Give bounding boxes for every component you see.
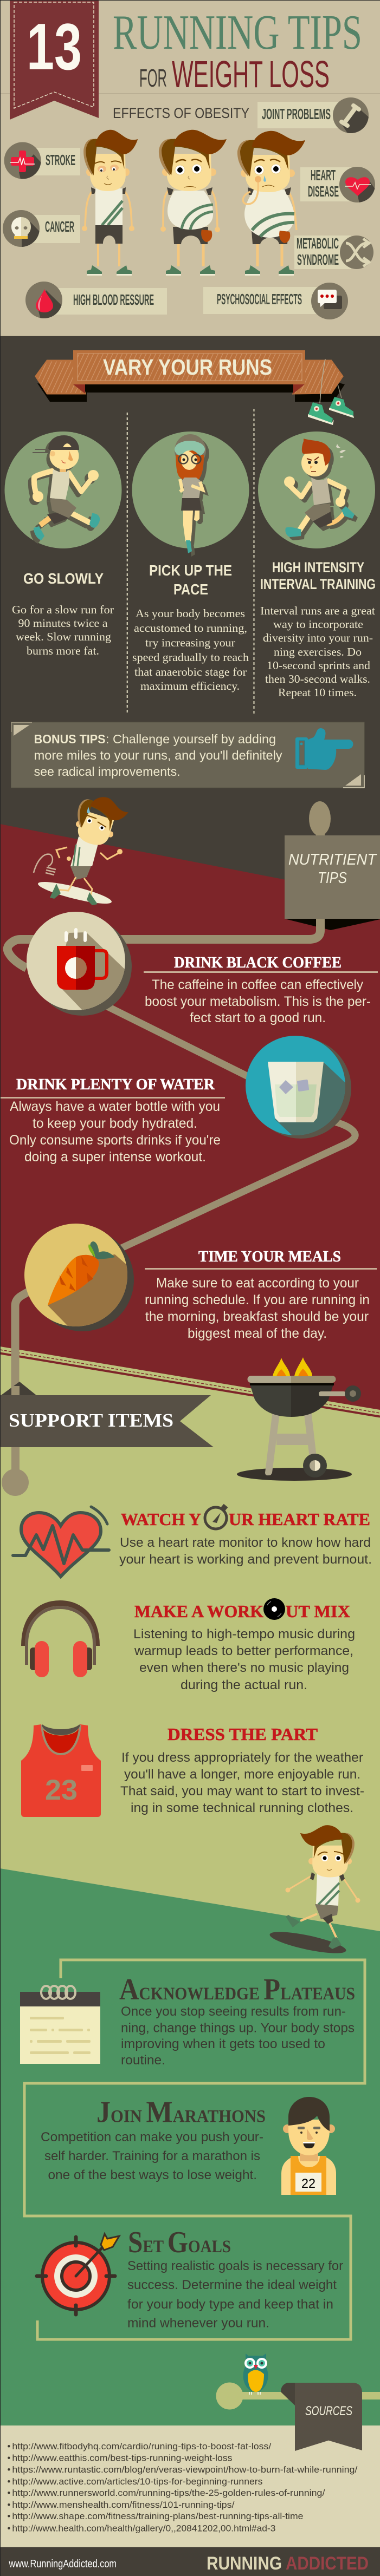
item: watch your heart rate: your heart is working and prevent burnout.: [119, 1552, 372, 1567]
icon: heart: [345, 177, 371, 196]
text block: sources list: •: [8, 2500, 11, 2510]
text block: sources list: http://www.runnersworld.com/running-tips/the-25-golden-rules-of-running/: [12, 2488, 325, 2498]
item: acknowledge plateaus: ning, change things up. Your body stops: [121, 2021, 355, 2036]
icon: pointing hand: [295, 728, 353, 770]
circle: red-haired runner: [258, 431, 375, 548]
label: cancer: [3, 210, 80, 247]
text block: sources list: •: [8, 2477, 11, 2487]
icon: coffee mug: [27, 912, 132, 1018]
panel: vary your runs background: [0, 336, 380, 899]
banner: support items: SUPPORT ITEMS: [9, 1410, 173, 1431]
item: set goals: [37, 2226, 343, 2330]
item: join marathons: JOIN MARATHONS: [96, 2095, 266, 2129]
icon: jersey: [21, 1724, 101, 1817]
column: high intensity interval training: Interval runs are a great: [260, 604, 375, 617]
item: drink plenty of water: to keep your body hydrated.: [33, 1116, 197, 1131]
column: pick up the pace: As your body becomes: [136, 607, 245, 620]
item: make a workout mix: Listening to high-tempo music during: [133, 1627, 355, 1642]
item: watch your heart rate: WATCH Y: [121, 1509, 201, 1529]
item: dress the part: If you dress appropriately for the weather: [121, 1750, 363, 1765]
column: pick up the pace: speed gradually to reach: [132, 651, 249, 664]
item: dress the part: DRESS THE PART: [168, 1724, 318, 1744]
banner: 13 ribbon: 13: [27, 10, 82, 83]
item: dress the part: That said, you may want to start to invest-: [120, 1784, 364, 1799]
item: watch your heart rate: [13, 1504, 372, 1577]
column: pick up the pace: PACE: [173, 581, 208, 598]
item: dress the part: [21, 1724, 364, 1817]
item: make a workout mix: [24, 1598, 355, 1692]
item: time your meals: the morning, breakfast should be your: [145, 1309, 369, 1324]
icon: headphones: [24, 1603, 97, 1677]
icon: drumstick: [201, 230, 212, 242]
text block: sources list: https://www.runtastic.com/blog/en/veras-viewpoint/how-to-burn-fat-while-running/: [12, 2465, 358, 2475]
decoration: owl on branch: [216, 2353, 380, 2409]
icon: crossing arrows: [346, 239, 369, 266]
character: thin boy: [82, 130, 138, 276]
column: go slowly: 90 minutes twice a: [18, 617, 108, 630]
icon: vinyl record: [263, 1598, 285, 1620]
icon: bone: [342, 106, 359, 126]
item: watch your heart rate: UR HEART RATE: [229, 1509, 370, 1529]
icon: marathon runner portrait: 22: [301, 2176, 315, 2191]
item: time your meals: TIME YOUR MEALS: [198, 1248, 341, 1265]
item: drink black coffee: DRINK BLACK COFFEE: [174, 954, 342, 971]
column: high intensity interval training: Repeat 10 times.: [278, 686, 357, 699]
icon: hanging sneakers: [308, 359, 354, 425]
sign: nutritient tips: TIPS: [318, 869, 347, 887]
ribbon: sources: SOURCES: [305, 2404, 352, 2418]
banner: 13 ribbon: [10, 0, 99, 120]
item: dress the part: you'll have a longer, more enjoyable run.: [124, 1767, 360, 1782]
banner: vary your runs: VARY YOUR RUNS: [103, 355, 272, 380]
item: drink black coffee: boost your metabolism. This is the per-: [145, 994, 371, 1009]
sign: nutritient tips: [285, 801, 380, 930]
item: set goals: SET GOALS: [128, 2226, 231, 2259]
column: high intensity interval training: diversity into your run-: [263, 631, 373, 644]
label: heart disease: HEART: [311, 167, 336, 184]
icon: grill: [237, 1357, 361, 1481]
character: overweight boy: [159, 130, 227, 276]
column: pick up the pace: that anaerobic stage for: [134, 665, 247, 678]
item: set goals: for your body type and keep that in: [127, 2297, 333, 2312]
panel: footer background: [0, 2547, 380, 2576]
column: pick up the pace: maximum efficiency.: [140, 679, 240, 692]
label: high blood pressure: HIGH BLOOD RESSURE: [73, 291, 154, 308]
text block: sources list: http://www.active.com/articles/10-tips-for-beginning-runners: [12, 2477, 262, 2487]
item: time your meals: running schedule. If you are running in: [145, 1292, 370, 1307]
column: high intensity interval training: 10-second sprints and: [267, 659, 371, 672]
column: pick up the pace: PICK UP THE: [149, 562, 232, 579]
character: obese boy: [237, 131, 305, 276]
text block: sources list: •: [8, 2524, 11, 2534]
column: go slowly: [4, 431, 121, 657]
item: acknowledge plateaus: routine.: [121, 2053, 165, 2068]
text block: sources list: http://www.health.com/health/gallery/0,,20841202,00.html#ad-3: [12, 2524, 275, 2534]
text block: sources list: http://www.eatthis.com/best-tips-running-weight-loss: [12, 2454, 232, 2463]
item: make a workout mix: MAKE A WORK: [134, 1601, 263, 1621]
item: make a workout mix: UT MIX: [286, 1601, 350, 1621]
heading: effects of obesity: EFFECTS OF OBESITY: [113, 105, 249, 121]
item: drink plenty of water: doing a super intense workout.: [24, 1149, 206, 1165]
callout: bonus tips: : Challenge yourself by adding: [106, 732, 276, 746]
item: acknowledge plateaus: [20, 1973, 355, 2068]
icon: red cross: [10, 151, 35, 172]
item: drink black coffee: [27, 912, 378, 1025]
footer: site url and logo: www.RunningAddicted.com: [9, 2558, 117, 2570]
item: set goals: success. Determine the ideal weight: [127, 2278, 337, 2292]
text block: sources list: •: [8, 2512, 11, 2521]
label: joint problems: [257, 97, 369, 133]
item: drink plenty of water: [0, 1036, 352, 1165]
icon: jersey: 23: [45, 1774, 78, 1806]
label: metabolic syndrome: [294, 235, 373, 269]
column: go slowly: week. Slow running: [16, 630, 112, 643]
item: acknowledge plateaus: improving when it gets too used to: [121, 2037, 325, 2051]
circle: runner with cap: [4, 431, 121, 548]
text block: sources list: [8, 2442, 358, 2534]
label: cancer: CANCER: [45, 218, 74, 235]
item: time your meals: Make sure to eat according to your: [156, 1276, 359, 1291]
circle: runner with beanie: [132, 431, 249, 553]
icon: carrot: [24, 1224, 134, 1332]
item: watch your heart rate: Use a heart rate monitor to know how hard: [120, 1535, 371, 1550]
text block: sources list: http://www.fitbodyhq.com/cardio/runing-tips-to-boost-fat-loss/: [12, 2442, 272, 2451]
item: acknowledge plateaus: Once you stop seeing results from run-: [121, 2004, 346, 2019]
ribbon: sources: [281, 2383, 362, 2451]
label: stroke: [4, 142, 80, 179]
text block: sources list: http://www.shape.com/fitness/training-plans/best-running-tips-all-time: [12, 2512, 303, 2521]
panel: support items background: [0, 1346, 380, 1931]
text block: sources list: •: [8, 2465, 11, 2475]
callout: bonus tips: more miles to your runs, and you'll definitely: [34, 748, 282, 762]
text block: sources list: •: [8, 2442, 11, 2451]
title: FOR: [139, 64, 167, 92]
icon: skull: [11, 217, 31, 239]
column: high intensity interval training: way to incorporate: [273, 618, 363, 631]
item: set goals: Setting realistic goals is necessary for: [127, 2259, 343, 2273]
connector: nutrition path: [8, 919, 355, 1397]
item: drink plenty of water: Only consume sports drinks if you're: [9, 1133, 221, 1148]
column: pick up the pace: [132, 431, 249, 692]
item: join marathons: [41, 2095, 336, 2195]
item: join marathons: one of the best ways to lose weight.: [48, 2168, 257, 2182]
icon: blood drop: [36, 289, 53, 312]
icon: calendar: [20, 1986, 100, 2064]
label: heart disease: [300, 167, 375, 202]
item: make a workout mix: even when there's no music playing: [139, 1660, 349, 1675]
label: stroke: STROKE: [46, 152, 75, 168]
icon: target with arrow: [37, 2234, 119, 2315]
item: time your meals: [24, 1224, 377, 1341]
item: join marathons: self harder. Training for a marathon is: [44, 2149, 260, 2163]
icon: marathon runner portrait: [281, 2097, 336, 2195]
banner: vary your runs: [36, 350, 345, 402]
item: make a workout mix: during the actual run.: [181, 1678, 307, 1692]
item: drink plenty of water: Always have a water bottle with you: [10, 1099, 220, 1114]
label: high blood pressure: [25, 282, 167, 318]
icon: glass of water: [246, 1036, 352, 1142]
panel: running tips background: [0, 1868, 380, 2426]
footer: site url and logo: RUNNING: [207, 2553, 282, 2574]
text block: sources list: http://www.menshealth.com/fitness/101-running-tips/: [12, 2500, 235, 2510]
item: drink plenty of water: DRINK PLENTY OF WATER: [16, 1076, 215, 1093]
column: high intensity interval training: [258, 431, 376, 699]
panel: sources background: [0, 2425, 380, 2547]
text block: sources list: •: [8, 2454, 11, 2463]
text block: sources list: •: [8, 2488, 11, 2498]
label: psychosocial effects: [203, 283, 348, 319]
column: go slowly: Go for a slow run for: [12, 603, 114, 616]
label: heart disease: DISEASE: [308, 183, 339, 200]
column: pick up the pace: accustomed to running,: [134, 622, 247, 635]
character: walking boy: [268, 1825, 360, 1958]
sign: nutritient tips: NUTRITIENT: [288, 851, 377, 868]
panel: nutrition background: [0, 824, 380, 1418]
column: high intensity interval training: then 30-second walks.: [265, 672, 370, 685]
callout: bonus tips: see radical improvements.: [34, 764, 181, 779]
callout: bonus tips: BONUS TIPS: [34, 732, 106, 746]
icon: stopwatch: [205, 1504, 228, 1529]
icon: drumstick: [279, 231, 290, 243]
column: high intensity interval training: ning exercises. Do: [274, 645, 362, 658]
title: [113, 5, 362, 95]
footer: site url and logo: [9, 2553, 369, 2574]
item: join marathons: Competition can make you push your-: [41, 2130, 263, 2145]
column: go slowly: burns more fat.: [27, 644, 99, 657]
banner: support items: [0, 1382, 214, 1496]
item: drink black coffee: The caffeine in coffee can effectively: [152, 977, 363, 992]
footer: site url and logo: ADDICTED: [286, 2553, 369, 2574]
column: pick up the pace: try increasing your: [145, 636, 235, 649]
icon: speech bubbles: [318, 290, 342, 309]
item: drink black coffee: fect start to a good run.: [190, 1010, 326, 1025]
callout: bonus tips: [11, 722, 364, 788]
column: go slowly: GO SLOWLY: [23, 570, 104, 587]
connector: frame lines: [24, 1960, 365, 2339]
item: time your meals: biggest meal of the day.: [188, 1326, 327, 1341]
item: acknowledge plateaus: ACKNOWLEDGE PLATEAUS: [119, 1973, 355, 2006]
character: running boy on ellipse: [34, 790, 131, 908]
item: set goals: mind whenever you run.: [127, 2316, 269, 2330]
panel: effects of obesity background: [0, 0, 380, 336]
item: make a workout mix: warmup leads to better performance,: [134, 1644, 353, 1658]
item: dress the part: ing in some technical running clothes.: [131, 1801, 353, 1815]
icon: heart with pulse: [13, 1507, 109, 1577]
